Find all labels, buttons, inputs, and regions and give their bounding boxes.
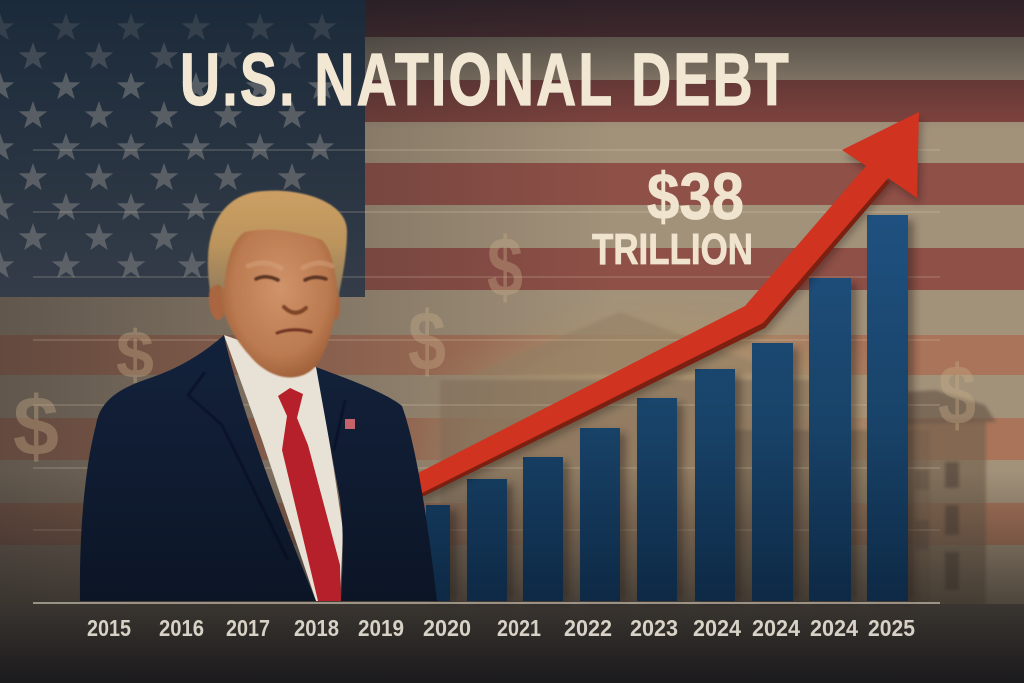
year labels: 2021 <box>497 615 541 641</box>
faded dollar signs: $ <box>116 317 154 393</box>
faded dollar signs: $ <box>938 348 976 442</box>
red rising arrow <box>418 112 922 503</box>
lapel pin <box>345 419 355 429</box>
axis line <box>33 602 940 604</box>
head <box>217 207 339 377</box>
faded dollar signs: $ <box>487 220 523 314</box>
year labels: 2020 <box>423 615 471 641</box>
year labels <box>87 615 915 641</box>
suit jacket <box>80 335 437 601</box>
neck and shirt <box>224 335 343 601</box>
bar chart <box>426 215 914 601</box>
year labels: 2023 <box>630 615 678 641</box>
year labels: 2024 <box>693 615 741 641</box>
figure in a suit <box>80 191 437 601</box>
flag canton with stars <box>0 0 365 297</box>
debt value: $38 <box>647 159 744 233</box>
facial features <box>248 263 332 333</box>
year labels: 2015 <box>87 615 131 641</box>
faded building <box>440 312 996 605</box>
year labels: 2016 <box>159 615 204 641</box>
year labels: 2018 <box>294 615 339 641</box>
faded dollar signs: $ <box>408 294 446 388</box>
floor band <box>0 604 1024 683</box>
year labels: 2024 <box>810 615 858 641</box>
hair <box>208 191 347 298</box>
title: U.S. NATIONAL DEBT <box>180 38 791 121</box>
year labels: 2017 <box>226 615 270 641</box>
trillion label: TRILLION <box>592 225 753 274</box>
red tie <box>278 388 341 601</box>
bottom shadow <box>0 470 1024 605</box>
year labels: 2019 <box>358 615 404 641</box>
grid lines <box>33 150 940 530</box>
year labels: 2024 <box>752 615 800 641</box>
year labels: 2025 <box>868 615 915 641</box>
faded dollar signs: $ <box>13 379 59 473</box>
faded dollar signs <box>13 220 976 473</box>
year labels: 2022 <box>564 615 612 641</box>
ears <box>209 276 340 320</box>
lapel edges <box>188 372 345 560</box>
